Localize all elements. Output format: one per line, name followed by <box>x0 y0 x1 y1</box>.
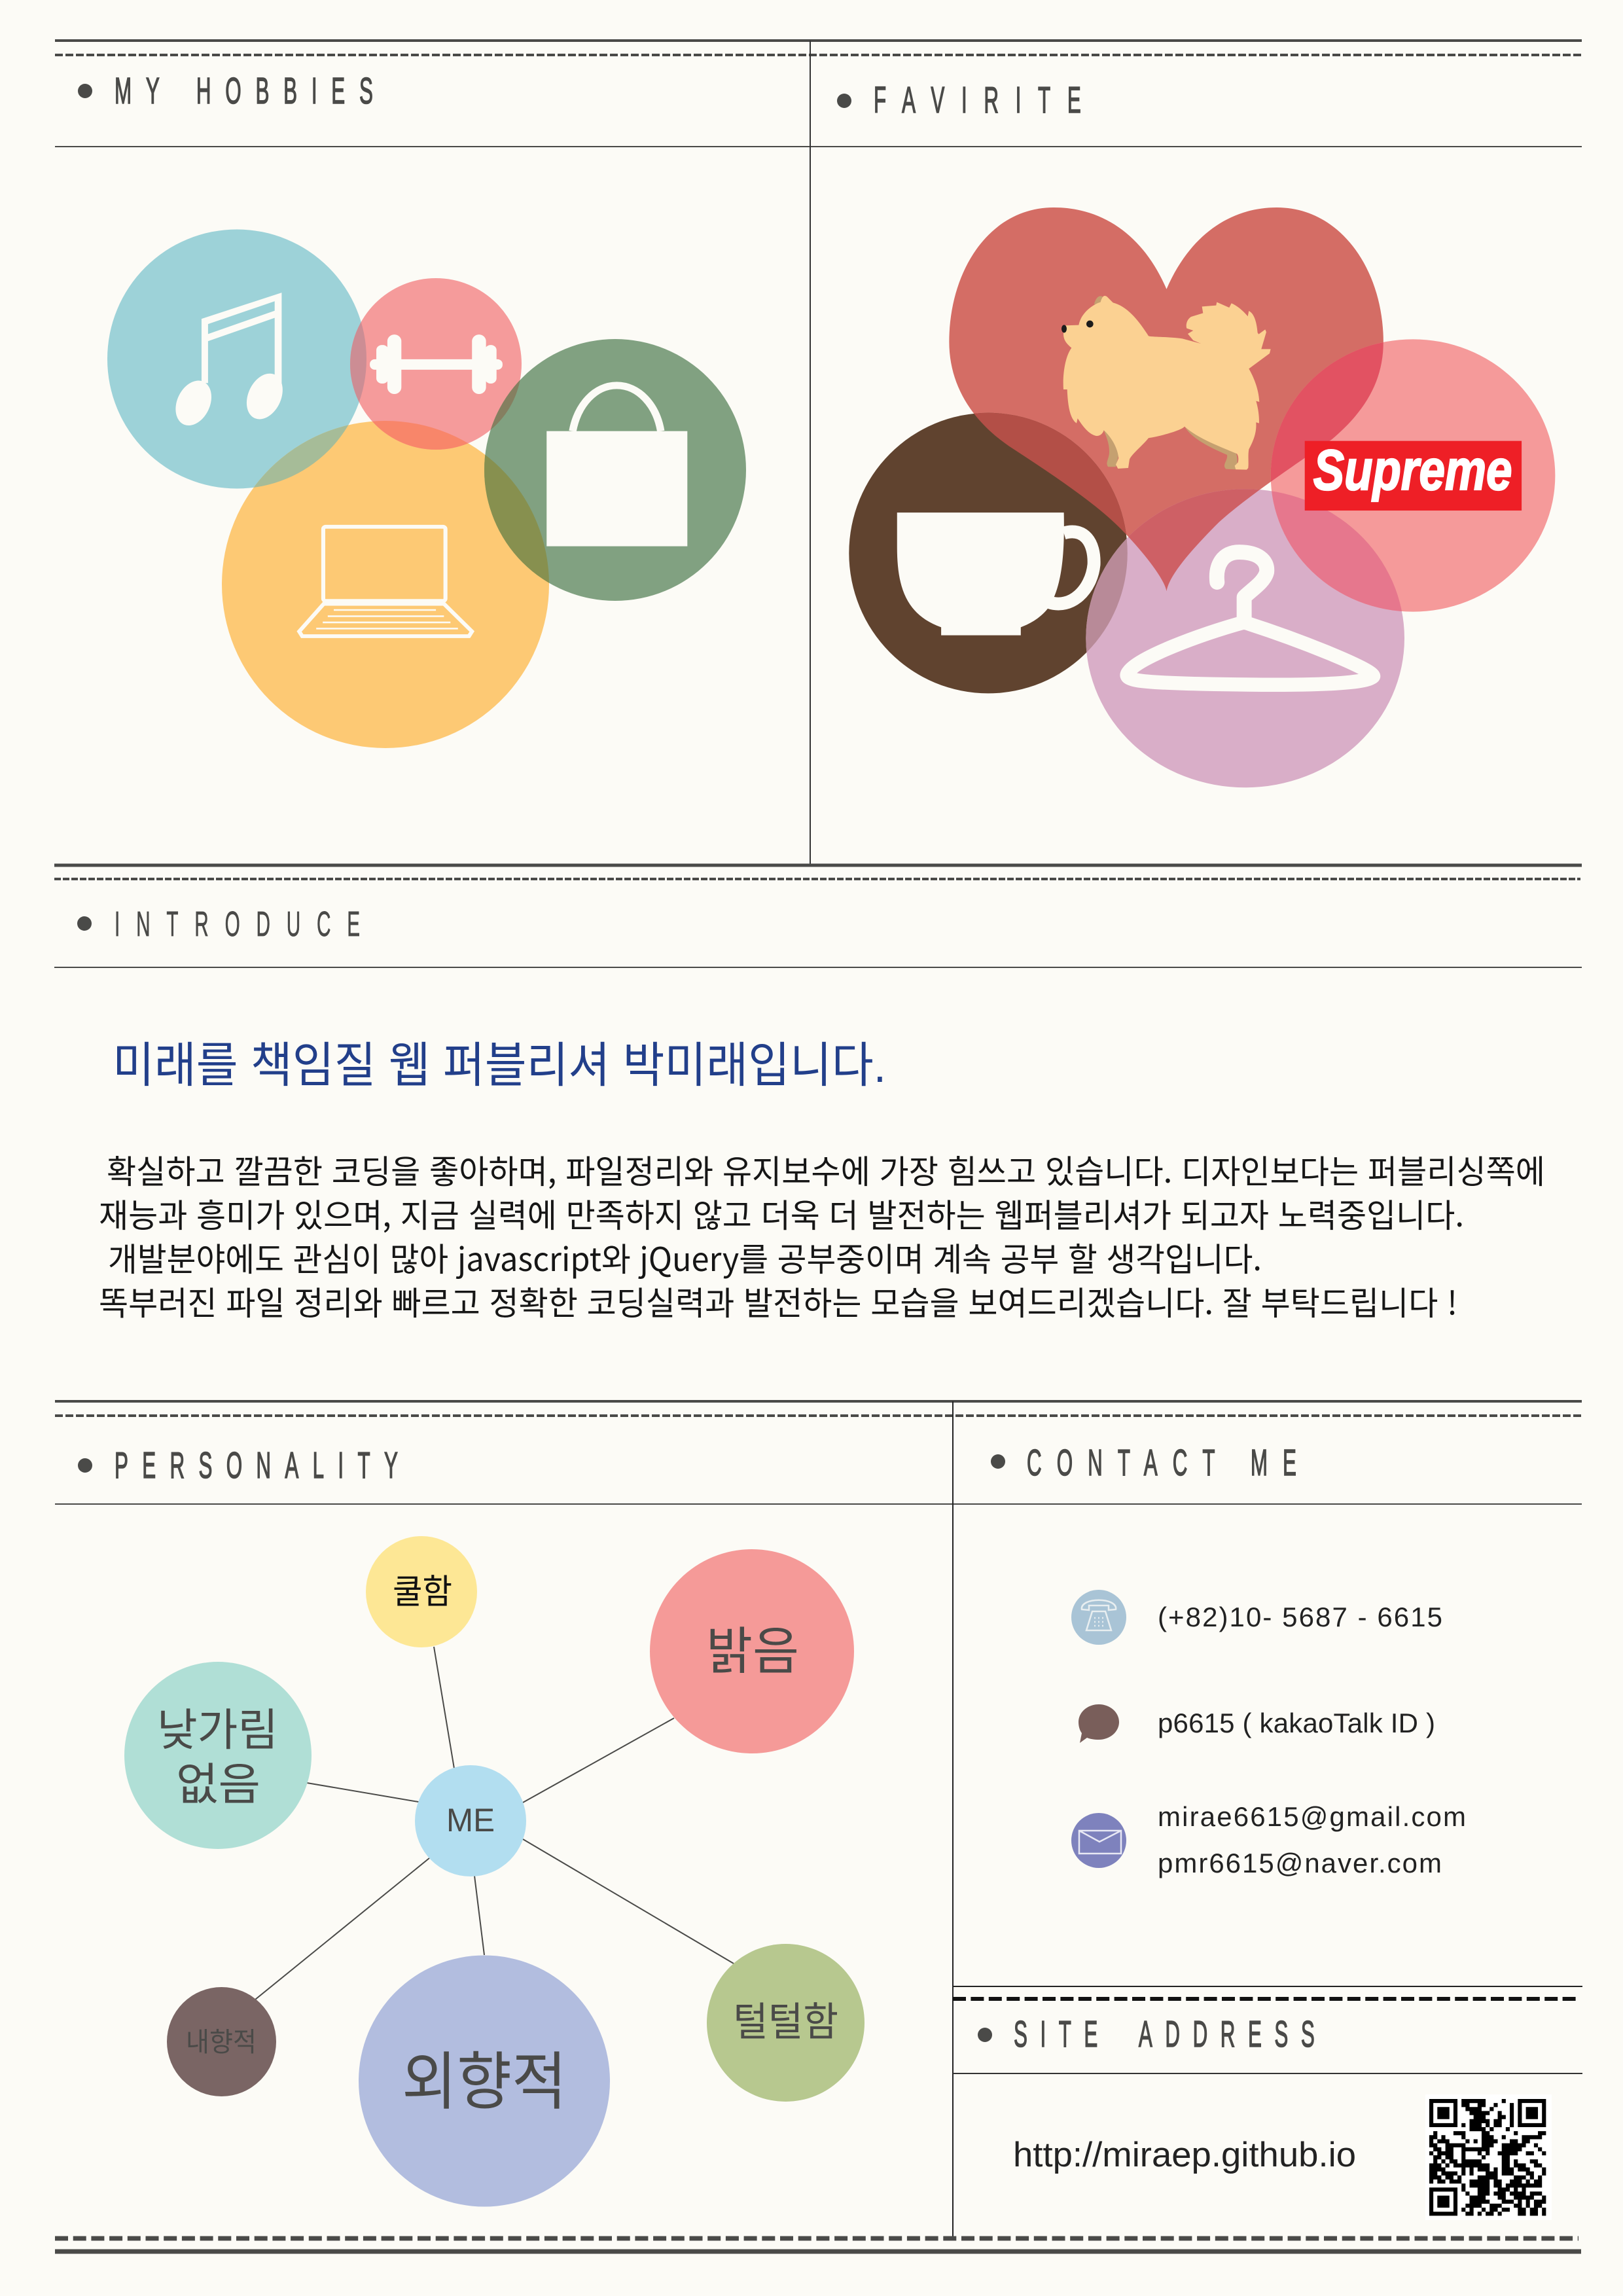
panel: site address rules <box>953 1986 1582 2073</box>
text block: introduction body: 개발분야에도 관심이 많아 javascript와 jQuery를 공부중이며 계속 공부 할 생각입니다. <box>108 1234 1262 1281</box>
bubble: cool <box>366 1536 477 1647</box>
text block: introduction body: 확실하고 깔끔한 코딩을 좋아하며, 파일정리와 유지보수에 가장 힘쓰고 있습니다. 디자인보다는 퍼블리싱쪽에 <box>107 1146 1545 1193</box>
text block: introduction body: 재능과 흥미가 있으며, 지금 실력에 만족하지 않고 더욱 더 발전하는 웹퍼블리셔가 되고자 노력중입니다. <box>99 1190 1464 1237</box>
bubble: me <box>415 1765 526 1876</box>
heading: site address: SITE ADDRESS <box>1014 2013 1315 2054</box>
panel: introduce rules <box>54 865 1582 967</box>
text block: introduction body <box>99 1146 1545 1325</box>
contact: email: mirae6615@gmail.com <box>1158 1801 1466 1832</box>
contact: kakaotalk: p6615 ( kakaoTalk ID ) <box>1158 1708 1435 1738</box>
bubble: cool: 쿨함 <box>393 1573 452 1611</box>
heading: introduce: INTRODUCE <box>115 905 360 944</box>
heading: favirite: FAVIRITE <box>874 79 1081 120</box>
bubble: easygoing <box>707 1944 865 2102</box>
bubble: bright <box>650 1549 854 1753</box>
icon: music notes <box>169 293 289 431</box>
panel: lower rules <box>55 1401 1582 2237</box>
icon: shopping bag <box>546 386 687 547</box>
bubble: extroverted <box>359 1956 610 2207</box>
contact: phone <box>1071 1590 1442 1645</box>
icon: laptop <box>299 527 472 636</box>
bubble: me: ME <box>446 1802 495 1839</box>
qr code <box>1425 2094 1552 2220</box>
bubble: extroverted: 외향적 <box>402 2047 567 2117</box>
text block: introduction body: 똑부러진 파일 정리와 빠르고 정확한 코딩실력과 발전하는 모습을 보여드리겠습니다. 잘 부탁드립니다 ! <box>99 1278 1457 1325</box>
bubble: bright: 밝음 <box>706 1623 799 1680</box>
icon: clothes hanger <box>1127 552 1374 685</box>
bubble: introverted: 내향적 <box>186 2027 257 2057</box>
icon: pomeranian dog <box>1061 296 1271 470</box>
bubble: not shy: 없음 <box>176 1760 260 1810</box>
panel: favourites bubbles <box>849 207 1555 787</box>
heading: introduction title: 미래를 책임질 웹 퍼블리셔 박미래입니다. <box>113 1038 886 1092</box>
bubble: easygoing: 털털함 <box>733 2000 838 2044</box>
icon: coffee cup <box>897 512 1094 636</box>
heading: personality: PERSONALITY <box>115 1444 398 1486</box>
contact: email: pmr6615@naver.com <box>1158 1848 1442 1878</box>
panel: bottom rules <box>55 2238 1581 2251</box>
heading: contact me: CONTACT ME <box>1027 1441 1296 1483</box>
icon: supreme logo: Supreme <box>1313 439 1512 502</box>
panel: top rules <box>55 41 1582 864</box>
bubble: not shy <box>124 1662 312 1849</box>
heading: my hobbies: MY HOBBIES <box>115 69 373 111</box>
bubble: not shy: 낮가림 <box>157 1706 278 1755</box>
panel: hobbies bubbles <box>107 229 746 748</box>
text: site url: http://miraep.github.io <box>1013 2136 1356 2174</box>
bubble: introverted <box>167 1987 276 2096</box>
connector lines: personality map <box>255 1647 734 2000</box>
contact: phone: (+82)10- 5687 - 6615 <box>1158 1602 1442 1632</box>
contact: email <box>1071 1801 1466 1878</box>
icon: dumbbell <box>370 334 503 394</box>
contact: kakaotalk <box>1079 1704 1435 1743</box>
